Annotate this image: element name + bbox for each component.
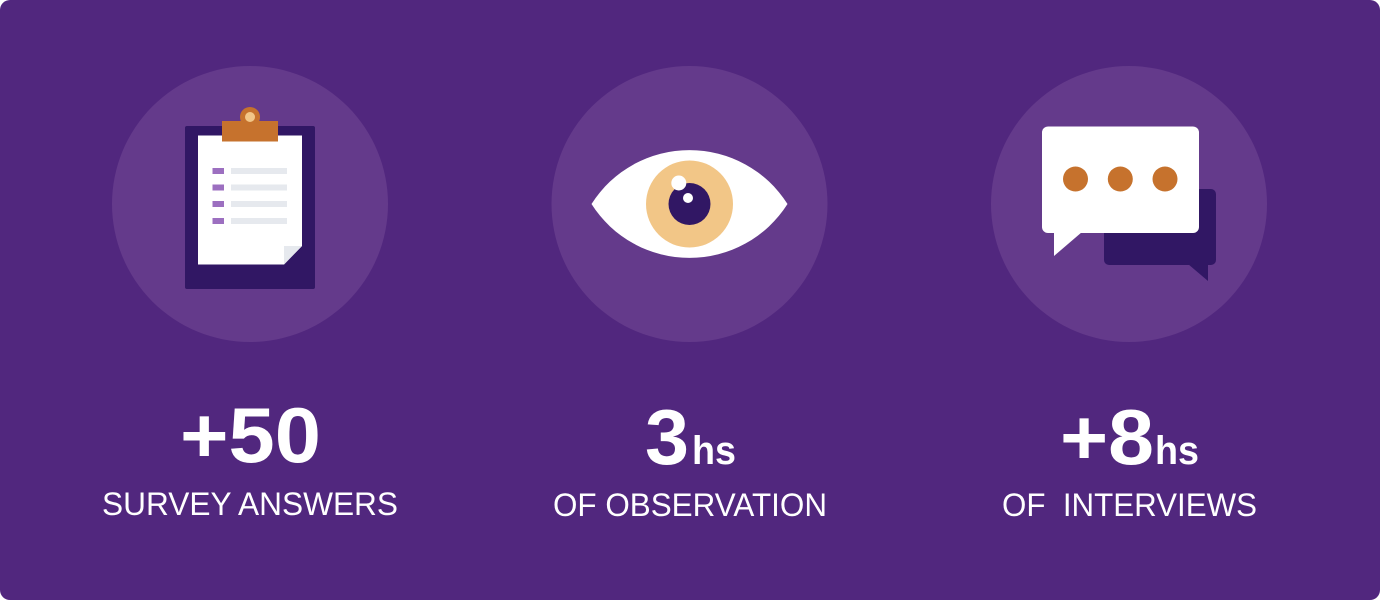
- stat: +8hs: hs: [1155, 429, 1199, 473]
- icon: clipboard: [185, 107, 315, 289]
- icon circle: chat backdrop: [991, 66, 1267, 342]
- label: survey answers: SURVEY ANSWERS: [102, 486, 398, 522]
- label: of interviews: OF INTERVIEWS: [1002, 487, 1257, 523]
- column: observation: [552, 66, 828, 523]
- icon circle: clipboard backdrop: [112, 66, 388, 342]
- icon: chat bubbles: [1042, 126, 1216, 281]
- stat: +8hs: [1060, 393, 1199, 481]
- icon circle: eye backdrop: [552, 66, 828, 342]
- stat: +8hs: +8: [1060, 393, 1154, 481]
- column: survey answers: [102, 66, 398, 522]
- column: interviews: [991, 66, 1267, 523]
- stat: +50: +50: [180, 391, 321, 479]
- stat: 3hs: [645, 393, 736, 481]
- stat: 3hs: hs: [692, 429, 736, 473]
- icon: eye: [592, 150, 788, 258]
- label: of observation: OF OBSERVATION: [553, 487, 827, 523]
- stat: 3hs: 3: [645, 393, 689, 481]
